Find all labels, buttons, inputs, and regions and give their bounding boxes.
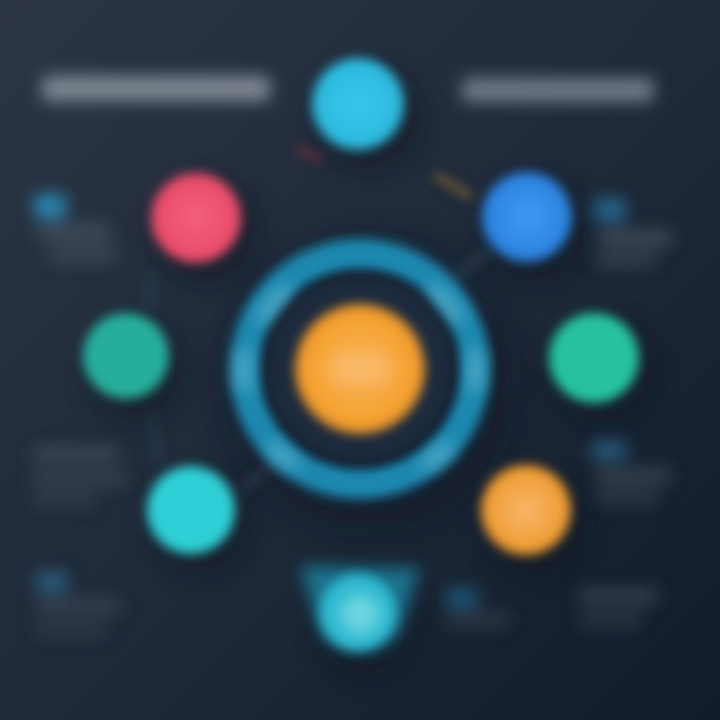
node: lower right orange [481, 465, 586, 574]
node: lower left teal [147, 466, 249, 572]
hub shadow [226, 242, 510, 526]
label: lower centre [446, 588, 510, 627]
label: lower left [36, 572, 120, 636]
node: right green [549, 313, 654, 422]
node: left green [83, 313, 184, 418]
hub inner dark disc [267, 276, 453, 462]
hub ring segments [243, 288, 476, 465]
side labels: right column [446, 198, 672, 627]
connectors [150, 148, 490, 490]
label: middle left [34, 446, 126, 506]
central hub [226, 242, 510, 526]
label: middle right [592, 440, 670, 504]
label: upper right [592, 198, 672, 266]
hub core highlight [330, 354, 390, 382]
heading: left title [42, 76, 270, 101]
node: top cyan [312, 58, 418, 168]
node: red [151, 173, 256, 282]
side labels: left column [34, 194, 126, 636]
hub outer ring [245, 254, 475, 484]
label: lower right [580, 588, 658, 626]
label: upper left [34, 194, 116, 262]
node: bottom teal [300, 566, 420, 674]
node: blue [482, 172, 587, 282]
hub orange core [295, 304, 425, 434]
heading: right title [462, 78, 654, 102]
